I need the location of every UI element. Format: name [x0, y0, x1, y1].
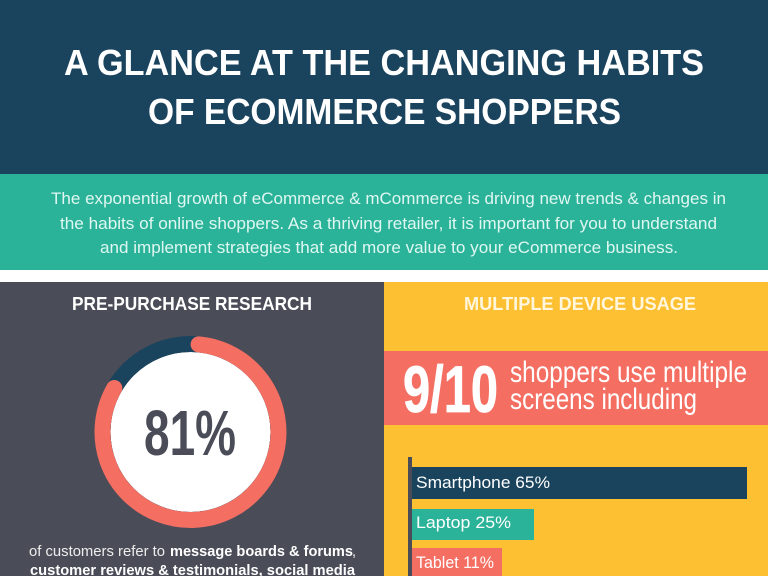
- callout text: screens including: [510, 383, 697, 416]
- donut value: 81%: [144, 397, 236, 469]
- bar: tablet: [412, 548, 502, 576]
- intro text: the habits of online shoppers. As a thriving retailer, it is important for you to understand: [60, 215, 717, 233]
- bar chart: devices: [408, 457, 747, 576]
- bar: laptop: Laptop 25%: [416, 513, 511, 532]
- callout band: 9/10 shoppers: [384, 351, 768, 426]
- bar: tablet: Tablet 11%: [416, 553, 494, 572]
- research description: [29, 544, 356, 576]
- panel: pre-purchase research: [0, 282, 384, 576]
- panel: introduction: [0, 174, 768, 270]
- intro text: and implement strategies that add more value to your eCommerce business.: [100, 239, 678, 257]
- bar: smartphone: [412, 467, 747, 499]
- title: A GLANCE AT THE CHANGING HABITS: [64, 42, 704, 83]
- intro text: [51, 190, 726, 257]
- research description: message boards & forums: [170, 544, 353, 560]
- heading: pre-purchase research: PRE-PURCHASE RESEARCH: [72, 294, 312, 314]
- research description: ,: [352, 544, 356, 560]
- panel: multiple device usage: [384, 282, 768, 576]
- panel: header: [0, 0, 768, 174]
- callout text: [510, 356, 747, 416]
- bar: smartphone: Smartphone 65%: [416, 473, 550, 492]
- title: [64, 42, 704, 132]
- bar: laptop: [412, 509, 534, 540]
- callout number: 9/10: [403, 352, 498, 426]
- heading: multiple device usage: MULTIPLE DEVICE USAGE: [464, 294, 696, 314]
- title: OF ECOMMERCE SHOPPERS: [148, 91, 621, 132]
- research description: of customers refer to: [29, 544, 165, 560]
- intro text: The exponential growth of eCommerce & mCommerce is driving new trends & changes in: [51, 190, 726, 208]
- donut chart: 81%: [102, 344, 278, 520]
